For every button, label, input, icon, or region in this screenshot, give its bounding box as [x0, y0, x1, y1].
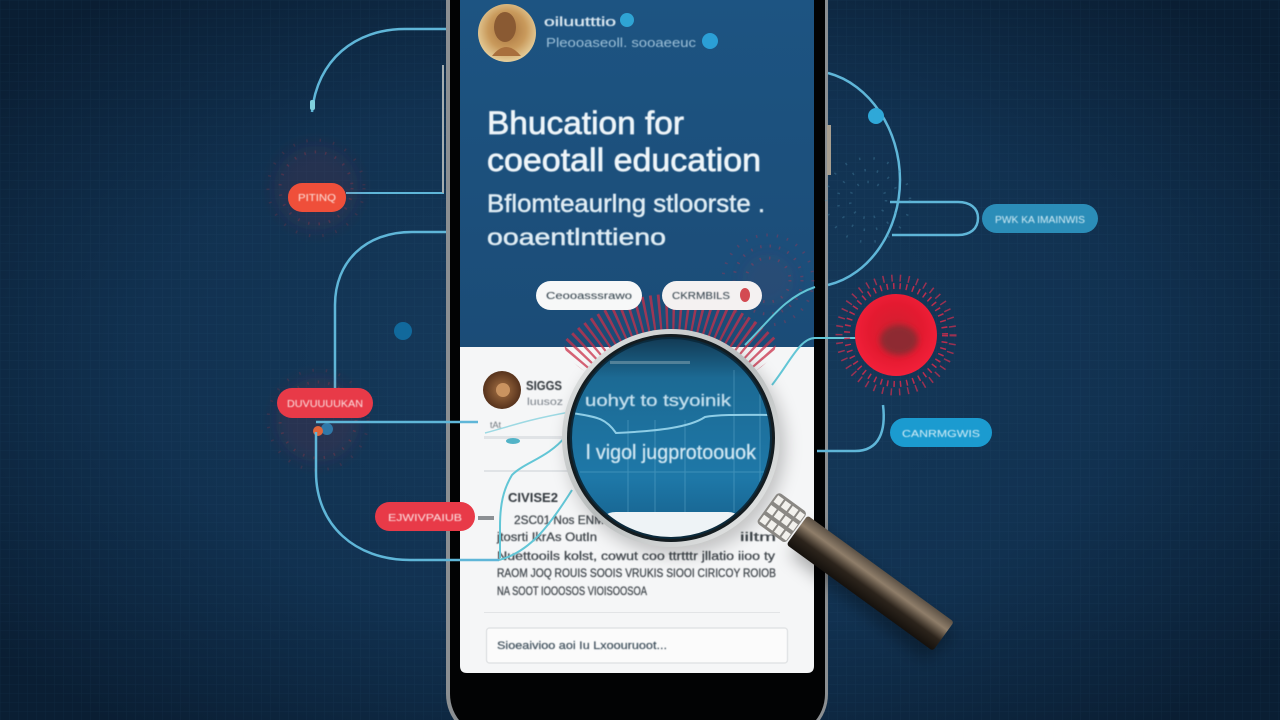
pill: blue top right: PWK KA IMAINWIS: [995, 215, 1085, 226]
paragraph: Nuettooils kolst, cowut coo ttrtttr jllatio iioo ty: [497, 551, 775, 563]
post divider rows: [484, 436, 574, 472]
paragraph: [496, 515, 776, 598]
button right: CKRMBILS: [672, 291, 730, 302]
post meta: luusoz: [527, 397, 563, 408]
paragraph: NA SOOT IOOOSOS VIOISOOSOA: [497, 586, 647, 598]
pill: red bottom: [375, 502, 475, 531]
lens glass: [571, 338, 771, 538]
red sparks behind lens: [564, 234, 814, 370]
pill: red middle: DUVUUUUKAN: [287, 399, 363, 410]
node: line end: [310, 100, 315, 110]
red glow left: [268, 140, 368, 470]
heading: [487, 105, 761, 178]
profile header: [478, 4, 718, 62]
magnifying glass: [562, 329, 955, 660]
post avatar: [483, 371, 521, 409]
button left: Ceooasssrawo: [546, 291, 633, 302]
connector lines right: [817, 73, 978, 451]
connector lines crossing phone: [316, 287, 856, 560]
lens upper text: uohyt to tsyoinik: [585, 391, 732, 410]
pill: blue lower right: CANRMGWIS: [902, 429, 980, 440]
input box: Sioeaivioo aoi Iu Lxoouruoot...: [497, 640, 667, 652]
connector lines left: [312, 29, 447, 390]
phone screen white section: [460, 347, 814, 673]
profile name: oiluutttio: [544, 14, 616, 29]
pill: blue lower right: [890, 418, 992, 447]
glass edge: [571, 338, 771, 538]
small grey mark beside bottom pill: [478, 516, 494, 520]
post author: SIGGS: [526, 378, 562, 393]
dotted cluster right: [826, 158, 910, 242]
avatar: [478, 4, 536, 62]
label pills: [277, 183, 1098, 531]
section title: CIVISE2: [508, 490, 558, 505]
pill: red top: [288, 183, 346, 212]
small marker inside post: [506, 438, 520, 444]
post content: [483, 371, 788, 663]
lens white strip: [608, 512, 735, 537]
input box: [486, 628, 788, 663]
subheading: ooaentlnttieno: [487, 224, 666, 250]
paragraph: iiltm: [740, 532, 776, 544]
handle: [786, 515, 954, 651]
heading: coeotall education: [487, 142, 761, 178]
badge: [702, 33, 718, 49]
subheading: [487, 190, 765, 250]
paragraph: 2SC01 Nos ENM: [514, 515, 604, 527]
badge: [620, 13, 634, 27]
divider: [484, 612, 780, 613]
node: small blue dot: [394, 322, 412, 340]
lens content: [575, 361, 768, 537]
paragraph: jtosrti IkrAs OutIn: [496, 532, 597, 544]
phone screen blue section: [460, 0, 814, 348]
post small text: tAt: [490, 420, 502, 430]
pill: red bottom: EJWIVPAIUB: [388, 513, 462, 524]
buttons: [536, 281, 762, 310]
subheading: Bflomteaurlng stloorste .: [487, 190, 765, 218]
pill: red middle: [277, 388, 373, 418]
node: right blue dot: [868, 108, 884, 124]
paragraph: RAOM JOQ ROUIS SOOIS VRUKIS SIOOI CIRICOY ROIOB: [497, 568, 776, 580]
rim: [562, 329, 780, 547]
pill: blue top right: [982, 204, 1098, 233]
lens graph: [572, 413, 780, 433]
pill: red top: PITINQ: [298, 193, 336, 204]
button left: [536, 281, 642, 310]
heading: Bhucation for: [487, 105, 684, 141]
collar: [756, 492, 807, 544]
red virus node: [839, 278, 953, 392]
lens top text: [610, 361, 690, 364]
node: orange and blue marker: [313, 423, 333, 436]
button right: [662, 281, 762, 310]
lens shadow: [566, 336, 786, 556]
lens lower text: l vigol jugprotoouok: [586, 442, 757, 464]
phone body: [442, 0, 831, 720]
profile subtitle: Pleooaseoll. sooaeeuc: [546, 35, 697, 50]
handle shadow: [790, 525, 955, 660]
